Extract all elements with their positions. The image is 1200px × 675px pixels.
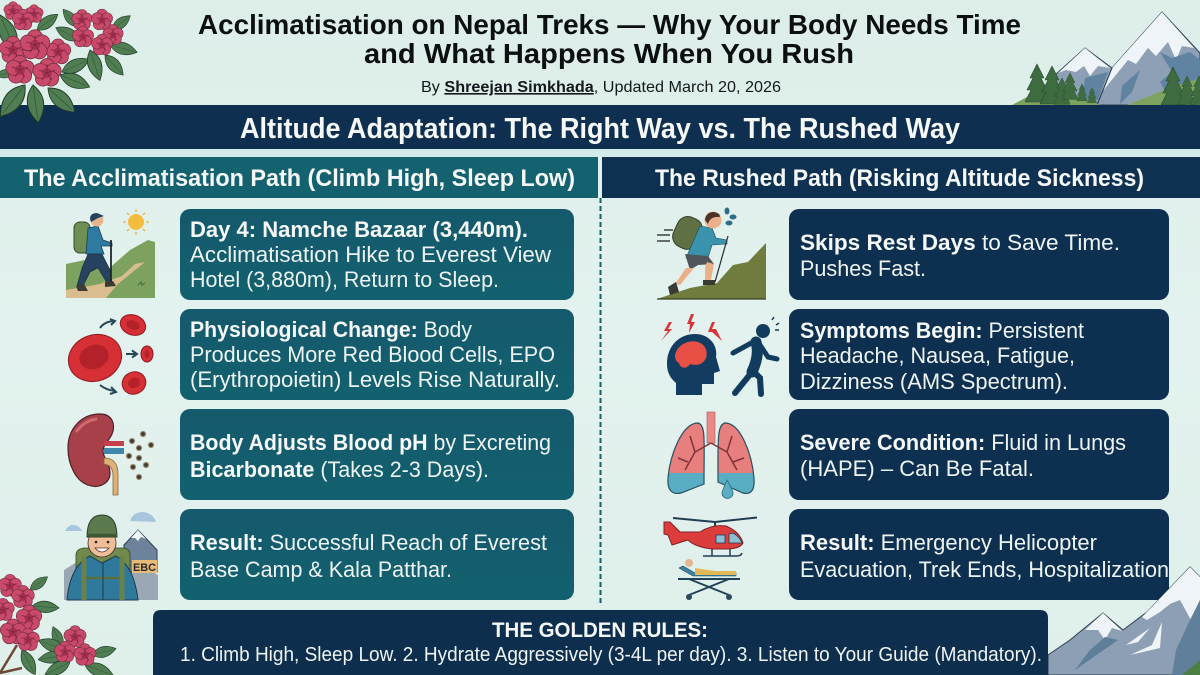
icon: happy trekker at EBC bbox=[64, 512, 158, 600]
title: Acclimatisation on Nepal Treks — Why Your Body Needs Time bbox=[198, 9, 1021, 40]
card: skips rest: Pushes Fast. bbox=[800, 256, 926, 281]
card: severe condition: (HAPE) – Can Be Fatal. bbox=[800, 456, 1034, 481]
card: day 4 namche: Day 4: Namche Bazaar (3,440m). bbox=[190, 217, 528, 242]
panel header: rushed path: The Rushed Path (Risking Altitude Sickness) bbox=[655, 165, 1144, 192]
footer: golden rules: THE GOLDEN RULES: bbox=[492, 619, 708, 642]
icon: red blood cells bbox=[62, 311, 153, 398]
card: physiological change: Physiological Change: Body bbox=[190, 317, 473, 342]
panel: acclimatisation path cards bbox=[180, 209, 574, 600]
card: symptoms: Headache, Nausea, Fatigue, bbox=[800, 343, 1075, 368]
icon: kidney bbox=[68, 414, 154, 495]
card: symptoms: Dizziness (AMS Spectrum). bbox=[800, 369, 1068, 394]
centre divider bbox=[600, 198, 602, 606]
card: severe condition: Severe Condition: Fluid in Lungs bbox=[800, 430, 1126, 455]
card: physiological change: Produces More Red Blood Cells, EPO bbox=[190, 342, 555, 367]
card: result everest bbox=[180, 509, 574, 600]
card: blood ph bbox=[180, 409, 574, 500]
card: result evacuation bbox=[789, 509, 1169, 600]
footer: golden rules bbox=[153, 610, 1048, 675]
card: symptoms: Symptoms Begin: Persistent bbox=[800, 318, 1085, 343]
title: and What Happens When You Rush bbox=[364, 38, 854, 69]
icon: mountains top right bbox=[1012, 12, 1200, 105]
title bbox=[198, 9, 1021, 69]
panel: rushed path cards bbox=[789, 209, 1169, 600]
icon: hiker with sun bbox=[66, 209, 155, 298]
panel header: rushed path bbox=[602, 157, 1200, 198]
card: physiological change bbox=[180, 309, 574, 400]
icon: rhododendron top left bbox=[0, 2, 139, 124]
icon: rhododendron bottom left bbox=[0, 573, 117, 675]
icon: headache and dizzy figure bbox=[661, 314, 779, 395]
card: blood ph: Bicarbonate (Takes 2-3 Days). bbox=[190, 457, 489, 482]
icon: happy trekker at EBC: EBC bbox=[133, 562, 156, 574]
icon: lungs with fluid bbox=[668, 412, 754, 499]
icon: helicopter and stretcher bbox=[664, 518, 757, 600]
card: physiological change: (Erythropoietin) Levels Rise Naturally. bbox=[190, 367, 560, 392]
icon: mountains bottom right bbox=[1048, 567, 1200, 675]
card: skips rest: Skips Rest Days to Save Time. bbox=[800, 230, 1120, 255]
card: day 4 namche bbox=[180, 209, 574, 300]
banner bbox=[0, 105, 1200, 149]
card: result evacuation: Result: Emergency Helicopter bbox=[800, 530, 1097, 555]
card: result everest: Base Camp & Kala Patthar. bbox=[190, 557, 452, 582]
icon: rushing hiker on slope bbox=[657, 208, 766, 299]
panel header: acclimatisation path: The Acclimatisation Path (Climb High, Sleep Low) bbox=[24, 165, 575, 192]
card: result everest: Result: Successful Reach of Everest bbox=[190, 530, 548, 555]
card: blood ph: Body Adjusts Blood pH by Excreting bbox=[190, 430, 551, 455]
panel header: acclimatisation path bbox=[0, 157, 598, 198]
card: day 4 namche: Acclimatisation Hike to Everest View bbox=[190, 242, 552, 267]
card: result evacuation: Evacuation, Trek Ends, Hospitalization bbox=[800, 557, 1169, 582]
light strip under banner bbox=[0, 149, 1200, 157]
card: severe condition bbox=[789, 409, 1169, 500]
card: day 4 namche: Hotel (3,880m), Return to Sleep. bbox=[190, 267, 499, 292]
footer: golden rules: 1. Climb High, Sleep Low. 2. Hydrate Aggressively (3-4L per day). 3. Listen to Your Guide (Mandatory). bbox=[180, 643, 1042, 666]
card: skips rest bbox=[789, 209, 1169, 300]
banner: Altitude Adaptation: The Right Way vs. The Rushed Way bbox=[240, 113, 960, 145]
card: symptoms bbox=[789, 309, 1169, 400]
byline: By Shreejan Simkhada, Updated March 20, 2026 bbox=[421, 79, 781, 96]
